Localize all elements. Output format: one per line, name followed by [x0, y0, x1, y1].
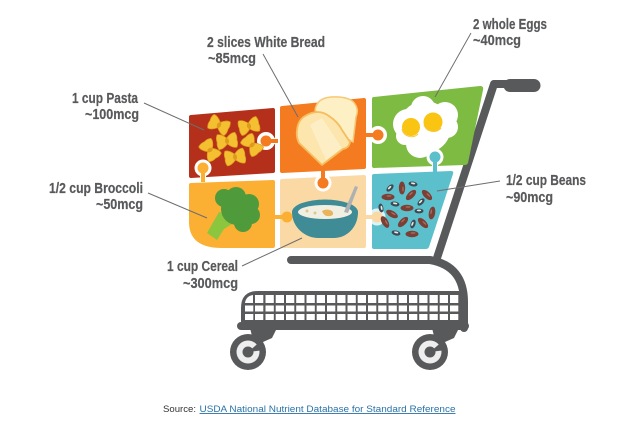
- source line: Source:: [163, 404, 196, 414]
- panel: bread: [280, 97, 366, 173]
- cart basket grid: [241, 291, 467, 328]
- cart frame: [230, 84, 534, 370]
- cart top rail: [291, 260, 464, 328]
- label: broccoli: [49, 181, 143, 213]
- label: cereal: ~300mcg: [183, 276, 238, 292]
- label: pasta: 1 cup Pasta: [72, 91, 139, 107]
- label: beans: [506, 173, 586, 206]
- panel: cereal: [275, 171, 366, 248]
- leader lines: [144, 33, 500, 266]
- panel: broccoli: [189, 180, 275, 248]
- icon: beans: [378, 181, 436, 237]
- icon: cereal bowl: [292, 186, 358, 238]
- cart pole: [437, 84, 510, 258]
- icon: broccoli: [207, 187, 260, 240]
- right wheel: [412, 328, 459, 370]
- label: beans: 1/2 cup Beans: [506, 173, 586, 189]
- label: eggs: [473, 17, 547, 49]
- label: white bread: ~85mcg: [208, 51, 256, 67]
- source line: USDA National Nutrient Database for Standard Reference: [200, 404, 456, 414]
- label: eggs: ~40mcg: [473, 33, 521, 49]
- label: broccoli: ~50mcg: [96, 197, 143, 213]
- label: cereal: [167, 259, 238, 292]
- label: pasta: ~100mcg: [85, 107, 139, 123]
- icon: bread slices: [297, 97, 357, 165]
- label: beans: ~90mcg: [506, 190, 553, 206]
- cart handle: [510, 79, 534, 92]
- label: cereal: 1 cup Cereal: [167, 259, 238, 275]
- panel: beans: [366, 171, 453, 249]
- panel: eggs: [366, 86, 483, 173]
- label: eggs: 2 whole Eggs: [473, 17, 547, 33]
- panel: pasta: [189, 108, 278, 182]
- label: broccoli: 1/2 cup Broccoli: [49, 181, 143, 197]
- label: white bread: [207, 35, 325, 67]
- label: pasta: [72, 91, 139, 123]
- icon: fried eggs: [393, 96, 458, 158]
- label: white bread: 2 slices White Bread: [207, 35, 325, 51]
- cart bottom rail: [241, 322, 465, 330]
- left wheel: [230, 328, 277, 370]
